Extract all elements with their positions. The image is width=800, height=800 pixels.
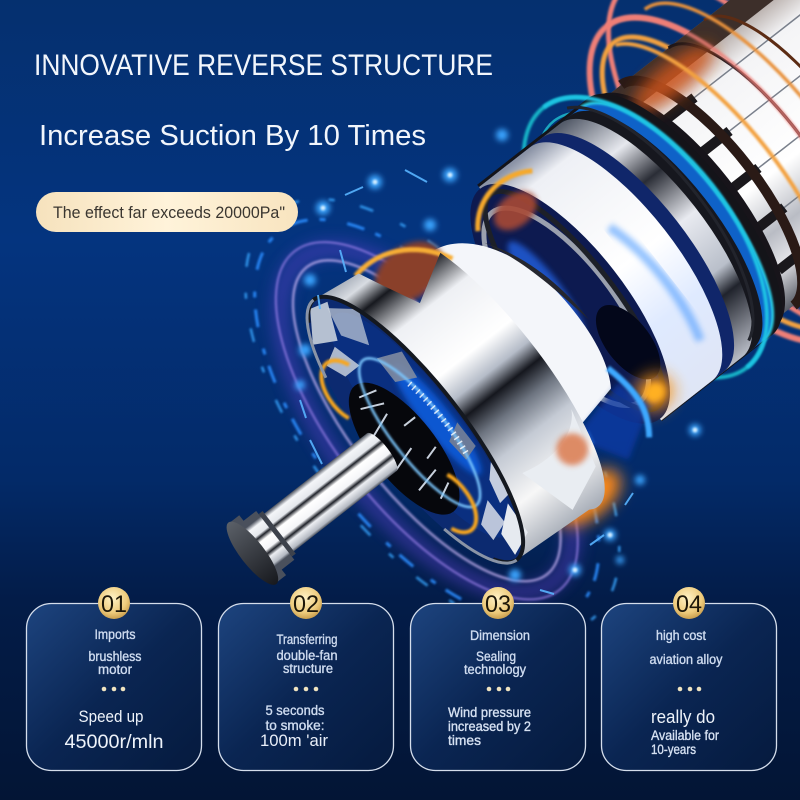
stat text 03: Wind pressure [448,704,531,720]
title: INNOVATIVE REVERSE STRUCTURE [34,49,493,82]
stat text 03 [448,704,531,748]
front face with glass rim [272,271,554,592]
hollow fan opening [437,155,703,453]
stat text 03: times [448,732,481,748]
glass facets upper [293,281,420,417]
heading text 02: structure [283,661,333,676]
dots 01 [102,687,125,691]
heading text 01: Imports [94,627,136,642]
orange coil arcs [603,0,800,337]
heading text 03: technology [464,662,526,677]
teal front arc [544,55,800,367]
heading text 04 [650,628,723,667]
white band [479,113,756,420]
black ring [479,82,796,420]
heading text 03 [464,628,530,677]
panel: 03 sealing technology [410,587,586,770]
glass facets lower [423,421,545,560]
dots 04 [678,687,701,691]
badge 02: 02 [293,591,319,618]
dots 03 [487,687,510,691]
heading text 02: double-fan [276,648,338,663]
rim [299,271,554,571]
badge 01: 01 [101,591,127,618]
fan blades [433,205,633,432]
heading text 04: aviation alloy [650,652,723,667]
subtitle: Increase Suction By 10 Times [39,120,426,152]
hub [330,366,479,531]
stat text 03: increased by 2 [448,718,531,734]
shaft [219,417,411,591]
panel: 01 brushless motor [26,587,202,770]
stat text 02: 100m 'air [260,731,328,750]
heading text 02 [276,632,338,676]
heading text 01 [88,627,142,677]
orange glow [628,366,682,419]
stat text 04 [651,707,719,757]
spark cores [320,172,698,572]
heading text 01: motor [98,662,132,677]
middle section: fan housing [402,49,800,478]
heading text 04: high cost [656,628,706,643]
stat text 01: Speed up [78,707,144,726]
notch glow [363,229,455,316]
stat text 04: Available for [651,727,719,743]
rear section: slatted stator [560,0,800,370]
outer black ring [477,65,800,421]
badge 03: 03 [485,591,511,618]
orange arcs [311,353,375,421]
panel: 04 aviation alloy [602,587,776,770]
stat text 01 [64,707,164,753]
illustration: brushless motor [175,0,800,697]
stat text 04: really do [651,707,715,727]
heading text 03: Sealing [476,649,516,664]
dark axial bars of first block row [663,93,800,270]
scattered spark lines [300,170,633,594]
sparks [295,129,701,581]
dark hole [584,294,673,390]
stat text 02: to smoke: [266,717,324,733]
stat text 02: 5 seconds [266,702,324,718]
stat text 02 [260,702,328,750]
blue glow ring [342,344,498,522]
heading text 01: brushless [88,649,142,664]
stat text 04: 10-years [651,741,696,757]
energy glow rings [175,136,690,697]
panel: 02 double-fan structure [218,587,394,770]
shaft end cap [219,515,286,591]
dots 02 [294,687,318,691]
second silver band [479,90,786,420]
callout pill [36,192,298,232]
stat text 01: 45000r/mln [64,732,164,753]
heading text 02: Transferring [276,632,338,647]
callout pill: The effect far exceeds 20000Pa" [53,204,285,222]
front section: silver cylinder [272,211,636,598]
orange fan piece [487,183,544,238]
navy mottled band [479,104,768,420]
back arcs: teal and coral rings [449,0,800,463]
heading text 03: Dimension [470,628,530,643]
blue ring [479,74,800,420]
badge 04: 04 [676,591,702,618]
